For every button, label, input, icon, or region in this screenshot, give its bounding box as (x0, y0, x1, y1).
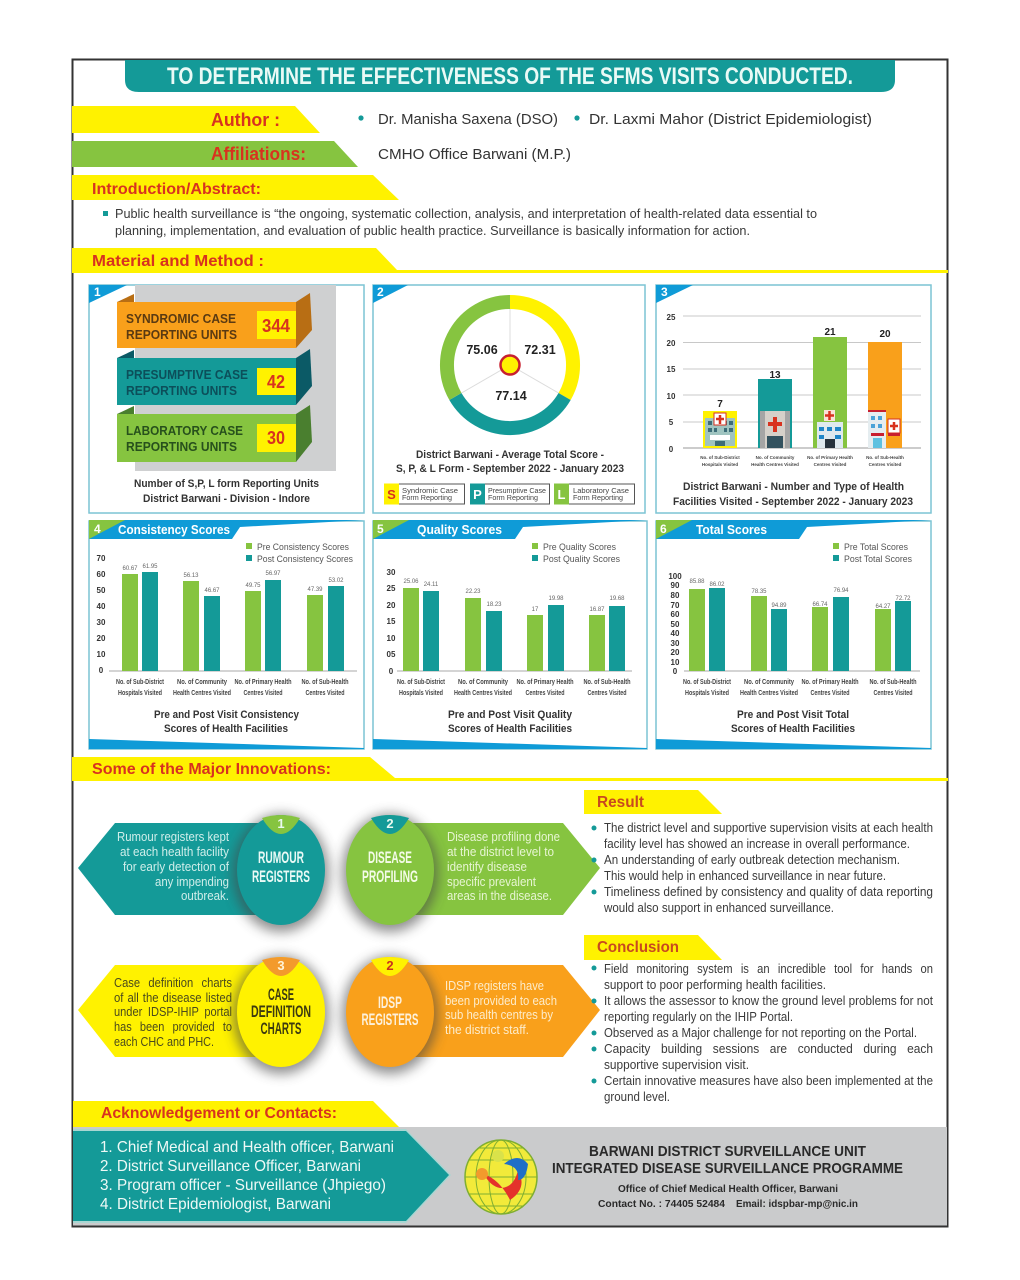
author names (358, 111, 872, 128)
innovation 4: IDSP registers: IDSP registers have (445, 978, 544, 993)
conclusion text: Certain innovative measures have also been implemented at the (604, 1073, 933, 1088)
innovation 1: rumour registers: REGISTERS (252, 867, 310, 886)
caption 3: District Barwani - Number and Type of Health (683, 481, 904, 493)
footer title (552, 1143, 903, 1210)
conclusion heading (584, 935, 722, 960)
legend 6 (833, 542, 912, 564)
bar chart: consistency: 30 (97, 618, 106, 627)
panel 3: facilities visited (656, 285, 931, 513)
ribbon: syndromic: 344 (262, 316, 290, 336)
result text (592, 820, 933, 915)
caption 6: Pre and Post Visit Total (737, 709, 849, 721)
conclusion text: ground level. (604, 1089, 670, 1104)
panel 4: consistency scores: 4 (94, 522, 101, 536)
bar chart: quality: 05 (387, 650, 396, 659)
bar chart: total: 40 (671, 629, 680, 638)
ribbon: laboratory: REPORTING UNITS (126, 440, 237, 454)
legend 6: Pre Total Scores (844, 542, 908, 552)
caption 2: District Barwani - Average Total Score - (416, 449, 604, 461)
author names: Dr. Manisha Saxena (DSO) (378, 111, 558, 128)
title banner: TO DETERMINE THE EFFECTIVENESS OF THE SFMS VISITS CONDUCTED. (167, 63, 853, 90)
bar chart: facilities: No. of Primary Health (807, 455, 853, 460)
bar chart: total: 60 (671, 610, 680, 619)
innovation 1: rumour registers (78, 814, 329, 932)
conclusion text: supportive supervision visit. (604, 1057, 749, 1072)
bar chart: consistency: 70 (97, 554, 106, 563)
innovation 4: IDSP registers: the district staff. (445, 1022, 529, 1037)
form legend: Form Reporting (573, 495, 623, 502)
bar chart: quality: No. of Primary Health (516, 679, 574, 686)
form legend (384, 484, 634, 504)
panel 1: reporting units (89, 285, 364, 513)
bar chart: facilities: 5 (669, 418, 674, 427)
legend 4: Pre Consistency Scores (257, 542, 349, 552)
bar chart: quality: Health Centres Visited (454, 690, 512, 697)
ribbon: syndromic (117, 293, 312, 348)
icon: sub health centre (868, 410, 900, 448)
author names: Dr. Laxmi Mahor (District Epidemiologist) (589, 111, 872, 128)
bar chart: quality: 16.87 (589, 607, 605, 613)
contacts arrow: 3. Program officer - Surveillance (Jhpiego) (100, 1177, 386, 1194)
bar chart: total: 72.72 (895, 596, 911, 602)
introduction heading (72, 175, 399, 200)
ribbon: presumptive: REPORTING UNITS (126, 384, 237, 398)
bar chart: quality: 25.06 (403, 579, 419, 585)
innovations heading (72, 757, 948, 781)
innovation 2: disease profiling: identify disease (447, 859, 527, 874)
bar chart: total: 30 (671, 639, 680, 648)
form legend: L (558, 487, 566, 502)
bar chart: consistency: 40 (97, 602, 106, 611)
bar chart: total: 80 (671, 591, 680, 600)
bar chart: quality: 22.23 (465, 589, 481, 595)
bar chart: facilities: 25 (667, 313, 676, 322)
legend 5: Post Quality Scores (543, 554, 620, 564)
bar chart: quality: 19.68 (609, 596, 625, 602)
bar chart: consistency: 50 (97, 586, 106, 595)
bar chart: total: 70 (671, 601, 680, 610)
caption 4 (154, 709, 300, 735)
form legend: Laboratory Case (573, 488, 629, 495)
footer title: INTEGRATED DISEASE SURVEILLANCE PROGRAMME (552, 1160, 903, 1177)
innovation 2: disease profiling: Disease profiling done (447, 829, 560, 844)
ribbon: presumptive (117, 349, 312, 405)
ribbon: syndromic: SYNDROMIC CASE (126, 312, 236, 326)
innovation 1: rumour registers: Rumour registers kept (117, 829, 229, 844)
heading 4: Consistency Scores (118, 522, 230, 537)
caption 3: Facilities Visited - September 2022 - January 2023 (673, 496, 913, 508)
bar chart: quality: 19.98 (548, 596, 564, 602)
innovation 3: case definition charts (78, 956, 329, 1074)
innovation 1: rumour registers: at each health facility (120, 844, 229, 859)
bar chart: quality: No. of Sub-Health (584, 679, 630, 686)
bar chart: quality: 0 (389, 667, 394, 676)
conclusion text: Field monitoring system is an incredible tool for hands on (604, 961, 933, 976)
innovation 1: rumour registers: RUMOUR (258, 848, 304, 867)
footer title: Email: idspbar-mp@nic.in (736, 1198, 858, 1210)
innovation 4: IDSP registers: 2 (386, 958, 394, 973)
bar chart: total: 20 (671, 648, 680, 657)
ribbon: laboratory: 30 (267, 428, 285, 448)
donut chart (447, 302, 573, 428)
result heading (584, 790, 722, 814)
innovation 2: disease profiling: areas in the disease. (447, 888, 552, 903)
bar chart: quality: 24.11 (424, 582, 439, 588)
result heading: Result (597, 794, 645, 811)
bar chart: total: 85.88 (689, 579, 705, 585)
abstract text: Public health surveillance is “the ongoing, systematic collection, analysis, and interpretation of health-related data essential to (115, 206, 817, 221)
affiliations banner (72, 141, 358, 167)
ribbon: presumptive: 42 (267, 372, 285, 392)
panel 6: total scores (656, 520, 931, 749)
bar chart: quality: Centres Visited (588, 690, 626, 697)
innovation 2: disease profiling: at the district level to (447, 844, 554, 859)
bar chart: facilities: 0 (669, 445, 674, 454)
panel 4: consistency scores (89, 520, 364, 749)
innovation 3: case definition charts: of all the disease listed (114, 990, 232, 1005)
bar chart: facilities: No. of Community (756, 455, 795, 460)
innovation 2: disease profiling: PROFILING (362, 867, 418, 886)
innovation 1: rumour registers: 1 (277, 816, 285, 831)
material and method heading: Material and Method : (92, 253, 264, 270)
icon: primary health centre (817, 410, 843, 448)
footer band (73, 1127, 947, 1226)
bar chart: consistency: 0 (99, 666, 104, 675)
innovation 4: IDSP registers (342, 956, 600, 1074)
innovation 3: case definition charts: CASE (268, 985, 294, 1004)
abstract text: planning, implementation, and evaluation of public health practice. Surveillance is basically information for action. (115, 223, 750, 238)
innovation 2: disease profiling: specific prevalent (447, 874, 536, 889)
bar chart: total: Centres Visited (810, 690, 850, 697)
bar chart: facilities: Health Centres Visited (751, 462, 799, 467)
innovation 1: rumour registers: any impending (155, 874, 229, 889)
caption 1: District Barwani - Division - Indore (143, 493, 310, 505)
bar chart: facilities: 20 (879, 329, 891, 340)
legend 5 (532, 542, 620, 564)
bar chart: total: No. of Community (744, 679, 794, 686)
bar chart: facilities: No. of Sub-Health (866, 455, 904, 460)
bar chart: total (668, 572, 920, 697)
bar chart: quality: 15 (387, 617, 396, 626)
innovations heading: Some of the Major Innovations: (92, 761, 331, 778)
acknowledgement heading: Acknowledgement or Contacts: (101, 1105, 337, 1122)
conclusion text: Capacity building sessions are conducted during each (604, 1041, 933, 1056)
result text: This would help in enhanced surveillance in near future. (604, 868, 886, 883)
panel 2: average score donut (373, 285, 645, 513)
bar chart: consistency: 60 (97, 570, 106, 579)
form legend: S (387, 487, 396, 502)
innovation 3: case definition charts: has been provided to (114, 1019, 232, 1034)
caption 5: Pre and Post Visit Quality (448, 709, 573, 721)
bar chart: consistency: 56.13 (183, 573, 199, 579)
innovation 3: case definition charts: CHARTS (260, 1019, 302, 1038)
innovation 3: case definition charts: DEFINITION (251, 1002, 311, 1021)
innovation 2: disease profiling: 2 (386, 816, 394, 831)
caption 4: Pre and Post Visit Consistency (154, 709, 300, 721)
panel 2: average score donut: 2 (377, 285, 384, 299)
bar chart: total: 10 (671, 658, 680, 667)
bar chart: facilities: Centres Visited (869, 462, 902, 467)
affiliations banner: Affiliations: (211, 144, 306, 164)
legend 4 (246, 542, 353, 564)
conclusion text: reporting regularly on the IHIP Portal. (604, 1009, 793, 1024)
bar chart: consistency: 53.02 (328, 578, 344, 584)
bar chart: total: 90 (671, 581, 680, 590)
bar chart: facilities: 21 (824, 327, 836, 338)
author banner: Author : (211, 110, 280, 130)
bar chart: consistency: No. of Community (177, 679, 227, 686)
legend 5: Pre Quality Scores (543, 542, 616, 552)
form legend: P (473, 487, 482, 502)
bar chart: consistency: 60.67 (122, 566, 138, 572)
bar chart: total: 100 (668, 572, 682, 581)
donut chart: 77.14 (495, 389, 527, 403)
innovation 2: disease profiling: DISEASE (368, 848, 412, 867)
ribbon: laboratory (117, 405, 312, 462)
innovation 1: rumour registers: for early detection of (123, 859, 229, 874)
contacts arrow: 4. District Epidemiologist, Barwani (100, 1196, 331, 1213)
caption 5 (448, 709, 573, 735)
bar chart: facilities: 15 (667, 365, 676, 374)
bar chart: consistency: 46.67 (204, 588, 220, 594)
form legend: Syndromic Case (402, 488, 458, 495)
innovation 4: IDSP registers: IDSP (378, 993, 402, 1012)
panel 6: total scores: 6 (660, 522, 667, 536)
innovation 3: case definition charts: 3 (277, 958, 285, 973)
bar chart: total: No. of Primary Health (802, 679, 858, 686)
bar chart: quality: 30 (387, 568, 396, 577)
bar chart: consistency: Centres Visited (244, 690, 282, 697)
acknowledgement heading (73, 1101, 399, 1127)
icon: community health centre (760, 411, 790, 448)
bar chart: facilities: 10 (667, 392, 676, 401)
bar chart: quality: Hospitals Visited (399, 690, 443, 697)
icon: IDSP globe logo (465, 1140, 537, 1214)
bar chart: consistency (97, 554, 357, 697)
form legend: Presumptive Case (488, 488, 546, 495)
caption 2: S, P, & L Form - September 2022 - January 2023 (396, 463, 624, 475)
bar chart: total: 0 (673, 667, 678, 676)
ribbon: presumptive: PRESUMPTIVE CASE (126, 368, 248, 382)
contacts arrow: 2. District Surveillance Officer, Barwani (100, 1158, 361, 1175)
author banner (72, 106, 320, 133)
bar chart: consistency: No. of Sub-District (116, 679, 165, 686)
caption 3 (673, 481, 913, 508)
result text: would also support in enhanced surveillance. (603, 900, 834, 915)
heading 6: Total Scores (696, 522, 767, 537)
bar chart: facilities: No. of Sub-District (700, 455, 740, 460)
caption 5: Scores of Health Facilities (448, 723, 572, 735)
legend 4: Post Consistency Scores (257, 554, 353, 564)
result text: The district level and supportive supervision visits at each health (604, 820, 933, 835)
heading 5: Quality Scores (417, 522, 502, 537)
bar chart: consistency: No. of Sub-Health (302, 679, 348, 686)
legend 6: Post Total Scores (844, 554, 912, 564)
bar chart: total: 66.74 (812, 602, 828, 608)
bar chart: consistency: 47.39 (307, 587, 323, 593)
bar chart: quality (387, 568, 632, 697)
caption 6 (731, 709, 855, 735)
contacts arrow: 1. Chief Medical and Health officer, Barwani (100, 1139, 394, 1156)
contacts arrow (73, 1129, 451, 1223)
bar chart: facilities: Centres Visited (814, 462, 847, 467)
bar chart: consistency: 20 (97, 634, 106, 643)
bar chart: total: Hospitals Visited (685, 690, 729, 697)
footer title: Contact No. : 74405 52484 (598, 1198, 725, 1210)
donut chart: 75.06 (466, 343, 498, 357)
bar chart: quality: Centres Visited (526, 690, 564, 697)
bar chart: total: 50 (671, 620, 680, 629)
bar chart: total: 76.94 (833, 588, 849, 594)
bar chart: total: 94.89 (771, 603, 787, 609)
result text: An understanding of early outbreak detection mechanism. (604, 852, 900, 867)
innovation 3: case definition charts: Case definition charts (114, 975, 232, 990)
bar chart: total: 86.02 (709, 582, 725, 588)
bar chart: consistency: Centres Visited (306, 690, 344, 697)
conclusion text (592, 961, 933, 1104)
affiliation text: CMHO Office Barwani (M.P.) (378, 146, 571, 163)
bar chart: quality: 18.23 (486, 602, 502, 608)
bar chart: consistency: 10 (97, 650, 106, 659)
bar chart: quality: No. of Community (458, 679, 508, 686)
bar chart: consistency: 49.75 (245, 583, 261, 589)
bar chart: quality: 25 (387, 584, 396, 593)
caption 1: Number of S,P, L form Reporting Units (134, 478, 319, 490)
bar chart: consistency: Health Centres Visited (173, 690, 231, 697)
caption 4: Scores of Health Facilities (164, 723, 288, 735)
form legend: Form Reporting (402, 495, 452, 502)
caption 2 (396, 449, 624, 475)
bar chart: facilities: 13 (769, 370, 781, 381)
caption 1 (134, 478, 319, 505)
material and method heading (72, 248, 948, 273)
bar chart: quality: No. of Sub-District (397, 679, 446, 686)
ribbon: syndromic: REPORTING UNITS (126, 328, 237, 342)
conclusion text: Observed as a Major challenge for not reporting on the Portal. (604, 1025, 917, 1040)
footer title: BARWANI DISTRICT SURVEILLANCE UNIT (589, 1143, 866, 1160)
bar chart: consistency: Hospitals Visited (118, 690, 162, 697)
innovation 2: disease profiling (342, 814, 600, 932)
innovation 4: IDSP registers: REGISTERS (362, 1010, 418, 1029)
conclusion text: It allows the assessor to know the ground level problems for not (604, 993, 933, 1008)
abstract text (103, 206, 817, 238)
result text: facility level has showed an increase in overall performance. (604, 836, 910, 851)
ribbon: laboratory: LABORATORY CASE (126, 424, 243, 438)
bar chart: total: No. of Sub-Health (870, 679, 916, 686)
panel 5: quality scores (373, 520, 647, 749)
caption 6: Scores of Health Facilities (731, 723, 855, 735)
introduction heading: Introduction/Abstract: (92, 181, 261, 198)
bar chart: total: 78.35 (751, 589, 767, 595)
conclusion text: support to poor performing health facilities. (604, 977, 826, 992)
bar chart: facilities: Hospitals Visited (702, 462, 738, 467)
innovation 4: IDSP registers: sub health centres by (445, 1007, 553, 1022)
innovation 4: IDSP registers: been provided to each (445, 993, 557, 1008)
bar chart: quality: 10 (387, 634, 396, 643)
poster frame (72, 60, 948, 1226)
innovation 3: case definition charts: under IDSP-IHIP portal (114, 1004, 232, 1019)
bar chart: facilities: 7 (717, 399, 723, 410)
innovation 1: rumour registers: outbreak. (181, 888, 229, 903)
donut chart: 72.31 (524, 343, 556, 357)
bar chart: total: No. of Sub-District (683, 679, 732, 686)
bar chart: consistency: No. of Primary Health (234, 679, 292, 686)
conclusion heading: Conclusion (597, 939, 679, 956)
innovation 3: case definition charts: each CHC and PHC. (114, 1034, 214, 1049)
result text: Timeliness defined by consistency and quality of data reporting (604, 884, 933, 899)
bar chart: facilities (667, 313, 921, 467)
bar chart: consistency: 56.97 (265, 571, 281, 577)
form legend: Form Reporting (488, 495, 538, 502)
bar chart: total: 64.27 (875, 604, 891, 610)
icon: sub-district hospital (705, 413, 735, 446)
panel 5: quality scores: 5 (377, 522, 384, 536)
bar chart: quality: 17 (532, 607, 539, 613)
bar chart: facilities: 20 (667, 339, 676, 348)
bar chart: total: Centres Visited (874, 690, 912, 697)
panel 3: facilities visited: 3 (661, 285, 668, 299)
bar chart: quality: 20 (387, 601, 396, 610)
bar chart: total: Health Centres Visited (740, 690, 798, 697)
panel 1: reporting units: 1 (94, 285, 101, 299)
bar chart: consistency: 61.95 (142, 564, 158, 570)
footer title: Office of Chief Medical Health Officer, Barwani (618, 1183, 838, 1195)
